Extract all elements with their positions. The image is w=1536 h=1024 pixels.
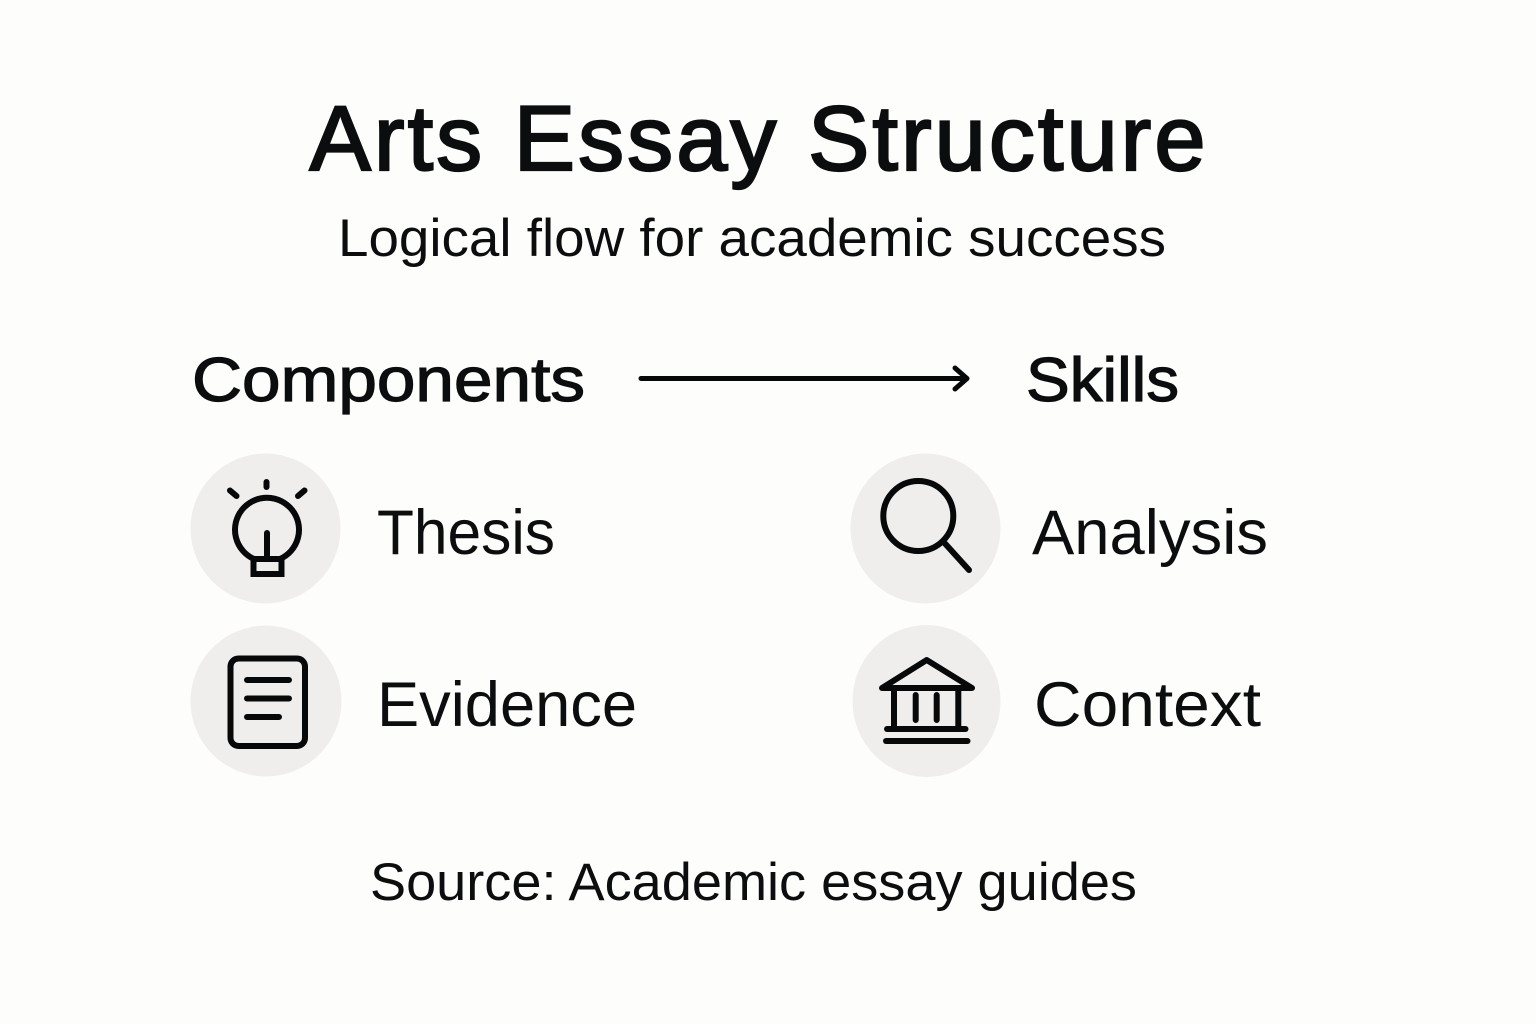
- source note: Source: Academic essay guides: [370, 853, 1137, 912]
- icon: classical building: [852, 625, 1000, 777]
- item: thesis: [190, 454, 555, 604]
- item: analysis: [850, 454, 1268, 604]
- label: thesis: Thesis: [377, 498, 555, 568]
- label: analysis: Analysis: [1032, 498, 1268, 568]
- icon: magnifying glass: [850, 454, 1000, 604]
- subtitle: Logical flow for academic success: [338, 209, 1166, 268]
- icon: light bulb: [190, 454, 340, 604]
- icon: document: [190, 626, 342, 776]
- label: evidence: Evidence: [377, 670, 637, 740]
- item: context: [852, 625, 1262, 777]
- label: context: Context: [1034, 670, 1262, 740]
- arrow: components to skills: [641, 368, 967, 389]
- heading: skills: Skills: [1026, 346, 1179, 415]
- item: evidence: [190, 626, 637, 776]
- title: Arts Essay Structure: [310, 88, 1206, 190]
- heading: components: Components: [192, 346, 585, 415]
